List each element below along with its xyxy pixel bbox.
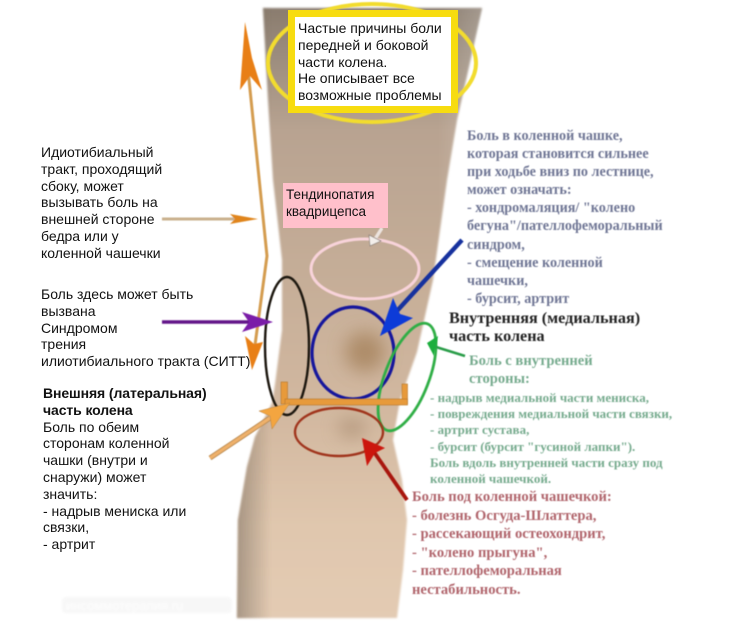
watermark: инсоммотерапия.ru [66,598,183,613]
callout text: Не описывает все [298,70,415,86]
text: lateral knee: связки, [43,519,89,535]
text: lateral knee: Боль по обеим [43,419,139,435]
callout label: квадрицепса [286,204,366,219]
purple arrow [162,312,273,332]
text: below kneecap [412,489,612,598]
text: ITBS: вызвана [41,303,96,319]
text: medial causes: - бурсит (бурсит "гусиной лапки"). [430,439,635,454]
orange arrow from lateral text [210,403,290,458]
leg [237,8,482,618]
text: below kneecap: - пателлофеморальная [412,563,562,579]
text: medial pain: стороны: [469,371,530,387]
red ellipse: below kneecap [295,408,383,456]
callout text [298,20,442,103]
text: lateral knee: Внешняя (латеральная) [43,385,207,401]
text: lateral knee: снаружи) может [43,469,146,485]
text: below kneecap: - "колено прыгуна", [412,545,547,561]
text: lateral knee [43,385,207,552]
text: lateral knee: чашки (внутри и [43,452,148,468]
text: ITBS: трения [41,336,86,352]
heading: medial knee [448,309,640,345]
text: lateral knee: часть колена [43,402,133,418]
orange bracket [281,382,408,405]
text: iliotibial tract: бедра или у [41,228,119,244]
text: kneecap pain: - хондромаляция/ "колено [467,200,635,216]
text: below kneecap: Боль под коленной чашечкой: [412,489,612,505]
watermark [62,597,232,613]
callout text: передней и боковой [298,37,428,53]
text: kneecap pain: может означать: [467,182,572,198]
black ellipse: iliotibial band [265,277,309,415]
text: iliotibial tract: вызывать боль на [41,194,158,210]
text: lateral knee: значить: [43,486,97,502]
text: lateral knee: - надрыв мениска или [43,503,186,519]
callout label [286,187,374,219]
text: kneecap pain: чашечки, [467,273,528,289]
red arrow [362,438,407,500]
green ellipse: medial knee [366,316,448,438]
text: iliotibial tract [41,144,162,261]
text: medial pain [468,353,593,387]
green arrow [427,336,465,356]
text: lateral knee: - артрит [43,536,95,552]
text: medial causes: - артрит сустава, [430,422,529,437]
yellow ellipse [268,4,476,122]
text: kneecap pain: синдром, [467,237,525,253]
text: medial causes: - надрыв медиальной части мениска, [430,390,649,405]
text: medial causes [430,390,672,486]
text: iliotibial tract: сбоку, может [41,178,124,194]
text: kneecap pain: Боль в коленной чашке, [467,128,623,144]
text: kneecap pain: при ходьбе вниз по лестнице, [467,164,654,180]
text: iliotibial tract: Идиотибиальный [41,144,153,160]
text: ITBS [41,286,250,369]
text: medial causes: Боль вдоль внутренней части сразу под [430,455,663,470]
callout text: Частые причины боли [298,20,442,36]
text: kneecap pain: бегуна"/пателлофеморальный [467,218,663,234]
callout: yellow box [288,10,458,113]
text: ITBS: илиотибиального тракта (СИТТ) [41,353,250,369]
text: kneecap pain: - бурсит, артрит [467,291,569,307]
small pink arrow [369,228,382,246]
text: ITBS: Боль здесь может быть [41,286,193,302]
blue arrow [380,240,462,336]
callout text: возможные проблемы [298,87,442,103]
callout: quadriceps tendinopathy [283,183,388,228]
text: medial pain: Боль с внутренней [469,353,593,369]
callout text: части колена. [298,54,387,70]
text: iliotibial tract: внешней стороне [41,211,155,227]
pink ellipse: quadriceps tendon [311,239,419,299]
text: iliotibial tract: тракт, проходящий [41,161,162,177]
text: below kneecap: - рассекающий остеохондрит, [412,526,605,542]
text: medial causes: коленной чашечкой. [430,471,551,486]
text: below kneecap: - болезнь Осгуда-Шлаттера, [412,508,596,524]
text: medial causes: - повреждения медиальной части связки, [430,406,672,421]
callout label: Тендинопатия [286,187,374,202]
orange horizontal arrow [162,214,258,224]
text: kneecap pain: - смещение коленной [467,255,603,271]
heading: medial knee: часть колена [449,327,545,345]
text: below kneecap: нестабильность. [412,582,521,598]
blue ellipse: kneecap [312,307,394,399]
text: ITBS: Синдромом [41,320,117,336]
heading: medial knee: Внутренняя (медиальная) [449,309,640,327]
text: kneecap pain [466,128,663,307]
orange double-headed arrow [240,22,267,370]
text: kneecap pain: которая становится сильнее [467,146,649,162]
text: lateral knee: сторонам коленной [43,435,169,451]
text: iliotibial tract: коленной чашечки [41,245,161,261]
